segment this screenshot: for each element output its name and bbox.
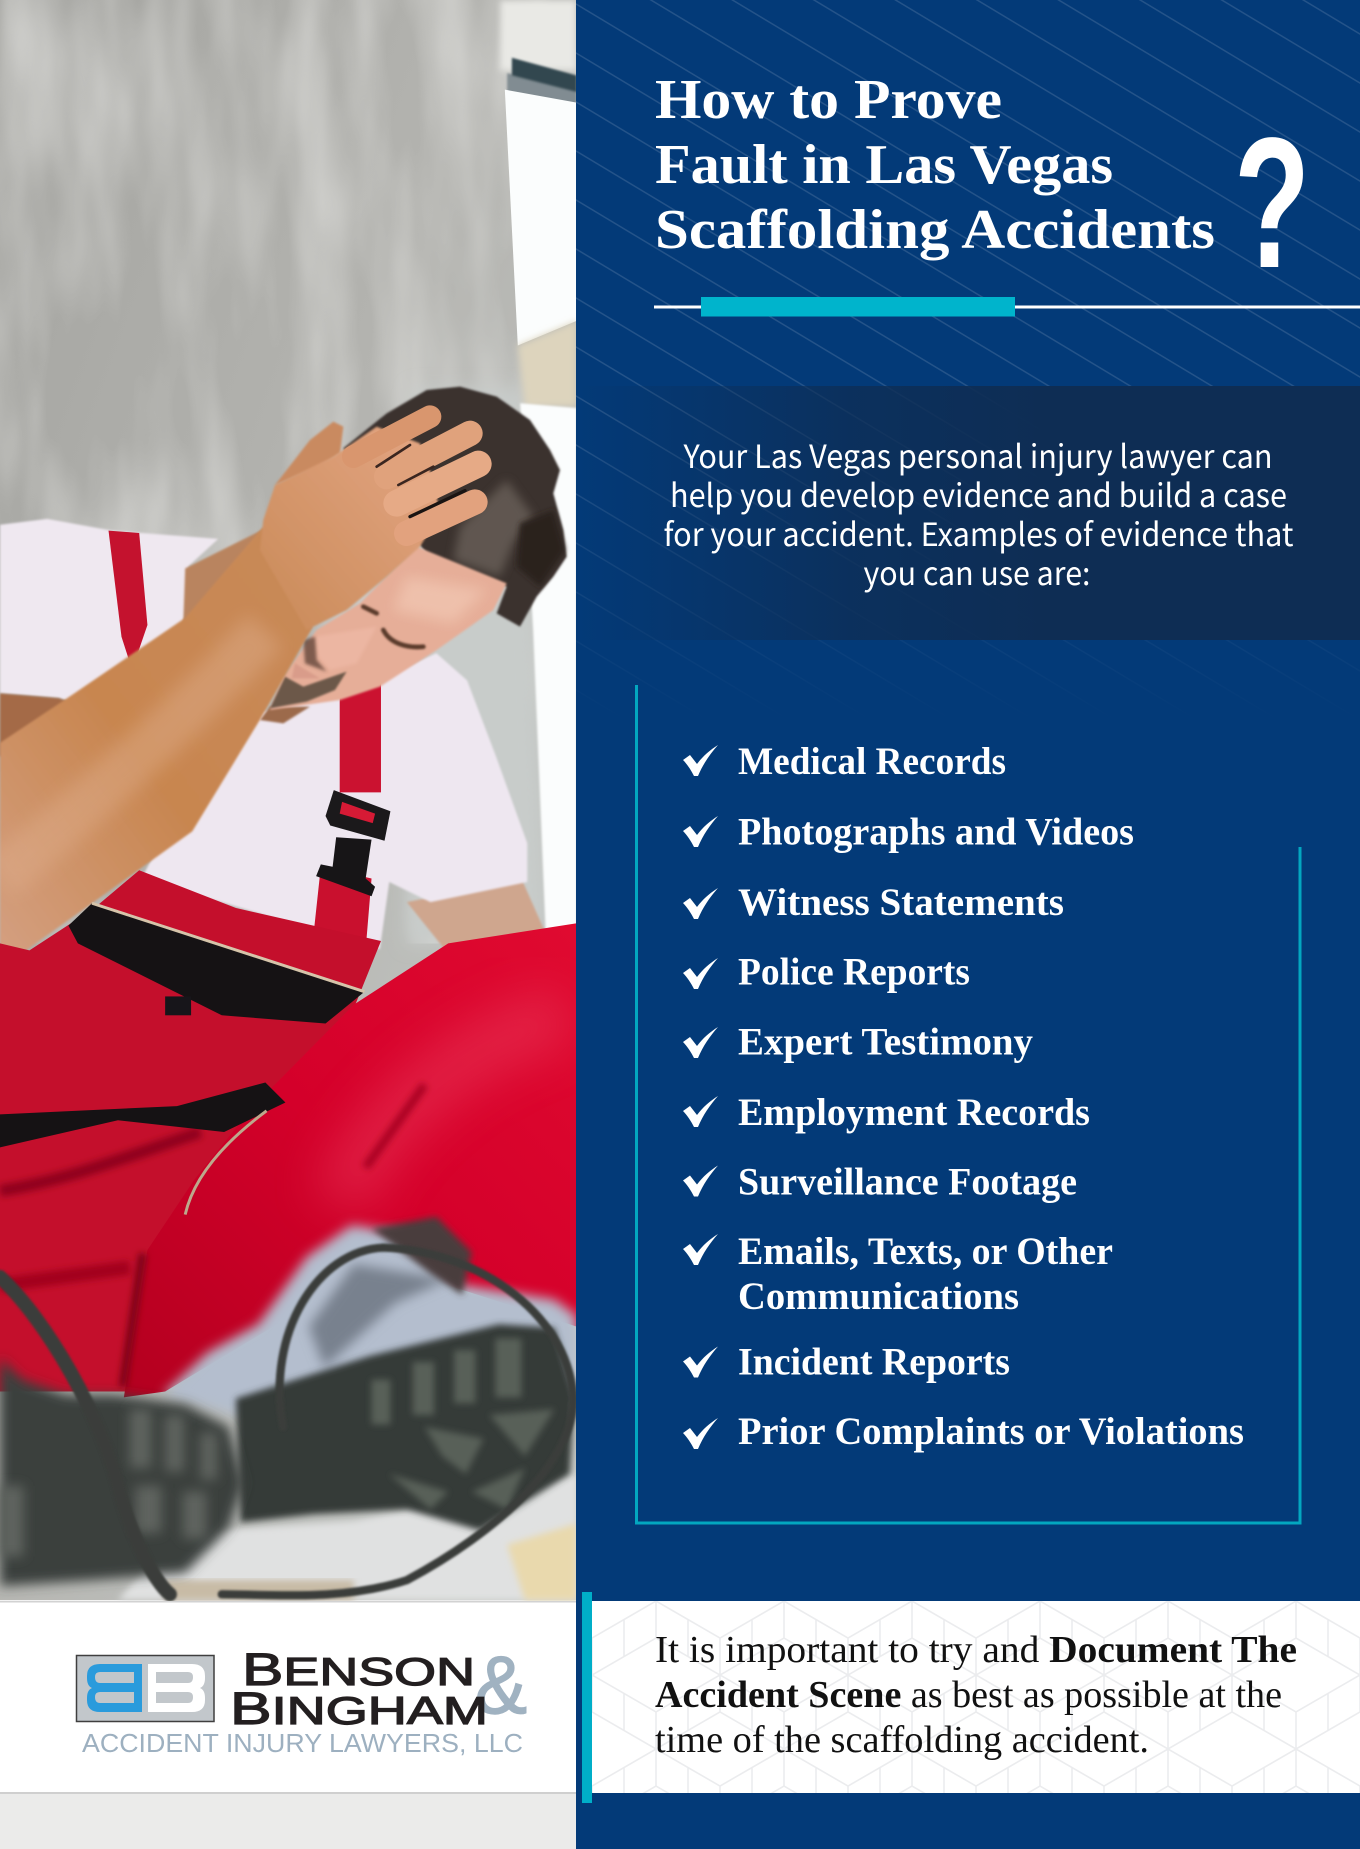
facial features (270, 607, 423, 708)
shirt torso (142, 653, 527, 949)
pocket tag (165, 996, 191, 1015)
item: employment records: Employment Records (738, 1091, 1090, 1134)
panel: document the scene callout (592, 1601, 1360, 1793)
left overall strap (109, 531, 147, 670)
panel: logo band (0, 1601, 576, 1794)
item: photographs and videos: Photographs and Videos (738, 810, 1134, 854)
item: police reports: Police Reports (738, 950, 970, 994)
item: emails, texts, or other communications: Communications (738, 1275, 1019, 1318)
logo name: B ENSON (242, 1644, 475, 1695)
forearm (0, 527, 313, 950)
item: surveillance footage: Surveillance Footage (738, 1160, 1077, 1204)
evidence checklist (683, 740, 1244, 1453)
logo name: B INGHAM (230, 1683, 488, 1734)
callout text: time of the scaffolding accident. (655, 1719, 1149, 1761)
list frame (636, 685, 1300, 1523)
item: incident reports: Incident Reports (738, 1340, 1010, 1384)
photo background: concrete wall and window (0, 0, 577, 1600)
left shoulder shirt (0, 519, 218, 710)
buckle (316, 790, 390, 896)
window and frame (254, 0, 577, 1097)
crease shadows (0, 1085, 425, 1387)
item: emails, texts, or other communications: Emails, Texts, or Other (738, 1230, 1113, 1273)
logo name (230, 1644, 488, 1734)
skin under sleeve (0, 692, 66, 757)
back arm (406, 882, 544, 947)
back of hand (260, 427, 440, 630)
intro text (664, 432, 1294, 595)
item: emails, texts, or other communications (683, 1230, 1113, 1318)
logo tagline: ACCIDENT INJURY LAWYERS, LLC (82, 1728, 523, 1758)
floor strip (165, 1580, 354, 1600)
arm highlight (0, 631, 265, 879)
pocket trim (92, 903, 364, 992)
title: Fault in Las Vegas (655, 134, 1113, 196)
panel: worker photo (0, 0, 577, 1600)
right leg (124, 923, 577, 1397)
fingers (353, 417, 478, 533)
hair dark curl (517, 510, 565, 587)
title divider (654, 297, 1360, 316)
hair (343, 387, 567, 627)
callout text: Accident Scene as best as possible at the (655, 1674, 1282, 1716)
panel: blue right column (576, 0, 1360, 1849)
sole treads (372, 1338, 554, 1509)
cables (0, 1248, 573, 1595)
neck shadow (260, 707, 310, 723)
floor (118, 1474, 577, 1600)
title (655, 69, 1215, 261)
skin peek (372, 1217, 472, 1295)
title: How to Prove (655, 69, 1002, 131)
right boot upper (163, 1225, 577, 1415)
wood block (507, 1524, 577, 1600)
hand (260, 417, 478, 630)
thumb (275, 422, 343, 485)
zipper (185, 1111, 267, 1215)
strip below the logo (0, 1793, 576, 1849)
intro text: for your accident. Examples of evidence that (664, 510, 1294, 556)
callout text: It is important to try and Document The (655, 1629, 1297, 1671)
right overall strap (340, 682, 381, 792)
icon: question mark: ? (1234, 99, 1310, 307)
item: expert testimony: Expert Testimony (738, 1020, 1033, 1064)
forehead highlight (396, 578, 480, 622)
logo emblem (76, 1656, 214, 1722)
right boot sole (236, 1324, 574, 1531)
item: witness statements: Witness Statements (738, 881, 1064, 924)
face (270, 547, 507, 710)
item: prior complaints or violations: Prior Complaints or Violations (738, 1410, 1244, 1453)
logo ampersand: & (475, 1640, 527, 1731)
left boot treads (0, 1409, 217, 1557)
intro text: help you develop evidence and build a case (670, 471, 1287, 517)
title: Scaffolding Accidents (655, 199, 1215, 261)
intro text: you can use are: (864, 549, 1090, 595)
hair grey streaks (453, 480, 533, 577)
belt strap (0, 1083, 285, 1147)
teal vertical accent bar (582, 1592, 592, 1803)
left boot (0, 1358, 244, 1586)
neck (182, 530, 262, 620)
intro text: Your Las Vegas personal injury lawyer can (683, 432, 1272, 478)
overalls body (0, 870, 381, 1391)
item: medical records: Medical Records (738, 740, 1006, 783)
boot shading (309, 1264, 448, 1368)
head (260, 387, 567, 723)
bib pocket (68, 903, 364, 1024)
leg highlights (342, 1014, 566, 1203)
callout text (655, 1629, 1297, 1761)
